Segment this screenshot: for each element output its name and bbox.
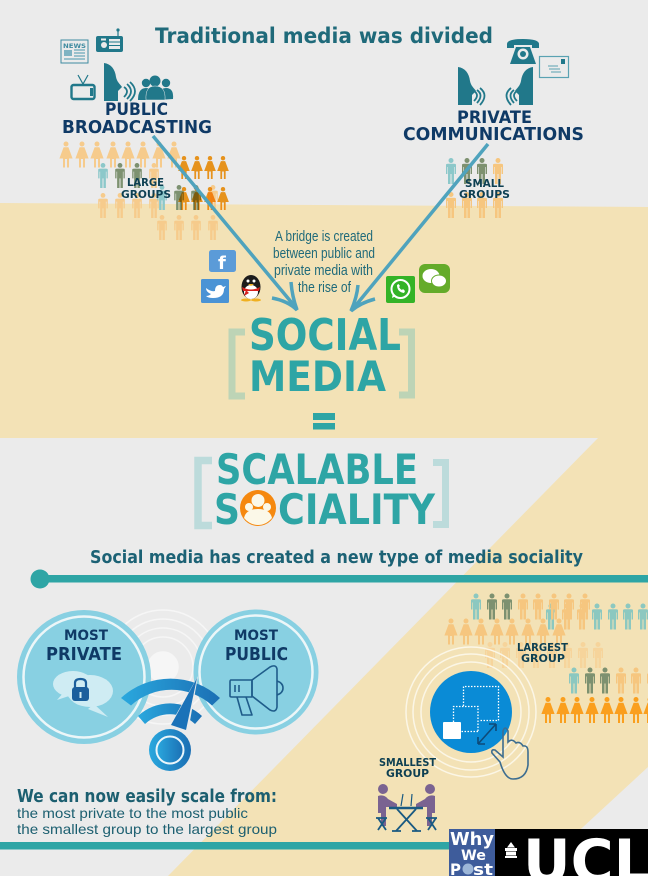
icon: chat bubbles with lock <box>53 671 113 717</box>
label: largest group <box>517 641 568 665</box>
heading: most private: PRIVATE <box>46 645 122 665</box>
bracket: social media right <box>399 332 412 395</box>
people: small groups <box>446 158 503 218</box>
panel: most public <box>194 610 318 734</box>
text: we can now easily scale: the most private to the most public <box>17 805 248 821</box>
heading: private communications: COMMUNICATIONS <box>403 125 584 145</box>
icon: envelope <box>540 56 568 78</box>
icon: left speaking head <box>458 67 484 105</box>
icon: audience <box>138 76 173 100</box>
rings behind dial <box>106 610 220 724</box>
label: largest group: LARGEST <box>517 641 568 654</box>
label: large groups: LARGE <box>127 176 164 189</box>
people: large groups <box>59 142 229 240</box>
icon: scaling touch circle <box>406 647 536 779</box>
text: bridge description: A bridge is created <box>275 228 373 245</box>
arrow: public to social media <box>153 136 297 310</box>
subheading: Social media has created a new type of media sociality <box>90 548 584 568</box>
label: largest group: GROUP <box>521 652 565 665</box>
panel: most private <box>17 610 151 744</box>
panel: public broadcasting <box>61 28 212 138</box>
label: smallest group: SMALLEST <box>379 756 436 769</box>
heading: social media: SOCIAL <box>249 310 401 361</box>
icon: newspaper <box>61 40 88 63</box>
heading: most public: MOST <box>234 628 278 644</box>
heading: social media <box>249 310 401 401</box>
heading: public broadcasting: BROADCASTING <box>62 118 212 138</box>
text: we can now easily scale: We can now easily scale from: <box>17 787 277 807</box>
heading: most private: MOST <box>64 628 108 644</box>
bracket: scalable left <box>198 460 212 526</box>
icon: two people at table <box>376 784 437 831</box>
icon: megaphone <box>230 666 283 715</box>
icon: whatsapp <box>386 276 415 303</box>
divider: bottom <box>0 842 450 850</box>
heading: public broadcasting <box>62 100 212 138</box>
label: smallest group <box>379 756 436 780</box>
heading: scalable sociality: SCALABLE <box>216 445 418 494</box>
text: we can now easily scale: the smallest group to the largest group <box>17 821 277 837</box>
heading: public broadcasting: PUBLIC <box>105 100 168 119</box>
divider with dot <box>30 570 648 588</box>
icon: facebook: f <box>218 253 226 274</box>
icon: twitter <box>201 279 229 303</box>
heading: scalable sociality: S <box>214 485 240 534</box>
label: small groups: SMALL <box>465 177 504 190</box>
logo: why we post: Why <box>450 829 494 850</box>
bracket: scalable right <box>433 462 446 524</box>
people: largest group <box>444 594 648 723</box>
arrow: private to social media <box>351 144 488 311</box>
equals sign <box>313 413 335 430</box>
label: large groups: GROUPS <box>121 188 171 201</box>
heading: most public <box>225 628 288 665</box>
logo: why we post: We <box>461 848 486 864</box>
label: smallest group: GROUP <box>386 767 429 780</box>
icon: qq penguin <box>241 275 261 302</box>
text: we can now easily scale <box>17 787 277 837</box>
icon: wechat <box>419 264 450 293</box>
icon: television <box>72 75 94 99</box>
icon: speaking head <box>104 63 135 101</box>
heading: scalable sociality: CIALITY <box>278 485 435 534</box>
text: bridge description: the rise of <box>298 279 352 296</box>
label: small groups <box>459 177 510 201</box>
logo: why we post <box>449 829 495 876</box>
icon: people circle <box>240 490 276 526</box>
icon: newspaper: NEWS <box>63 43 86 50</box>
icon: facebook <box>209 250 236 274</box>
bracket: social media left <box>232 332 245 396</box>
heading: scalable sociality <box>214 445 435 534</box>
label: large groups <box>121 176 171 201</box>
label: small groups: GROUPS <box>459 188 510 201</box>
text: bridge description: between public and <box>273 245 375 262</box>
panel: private communications <box>403 39 584 145</box>
icon: radio <box>96 28 123 52</box>
background: tan band and diagonal <box>0 203 648 876</box>
icon: telephone <box>507 39 539 64</box>
icon: scale dial <box>121 676 220 771</box>
heading: most public: PUBLIC <box>225 645 288 665</box>
text: bridge description: private media with <box>274 262 373 279</box>
heading: private communications: PRIVATE <box>457 108 532 128</box>
heading: most private <box>46 628 122 665</box>
icon: right speaking head <box>506 67 533 105</box>
title: Traditional media was divided <box>155 24 493 48</box>
heading: private communications <box>403 108 584 145</box>
heading: social media: MEDIA <box>249 352 386 401</box>
text: bridge description <box>273 228 375 296</box>
